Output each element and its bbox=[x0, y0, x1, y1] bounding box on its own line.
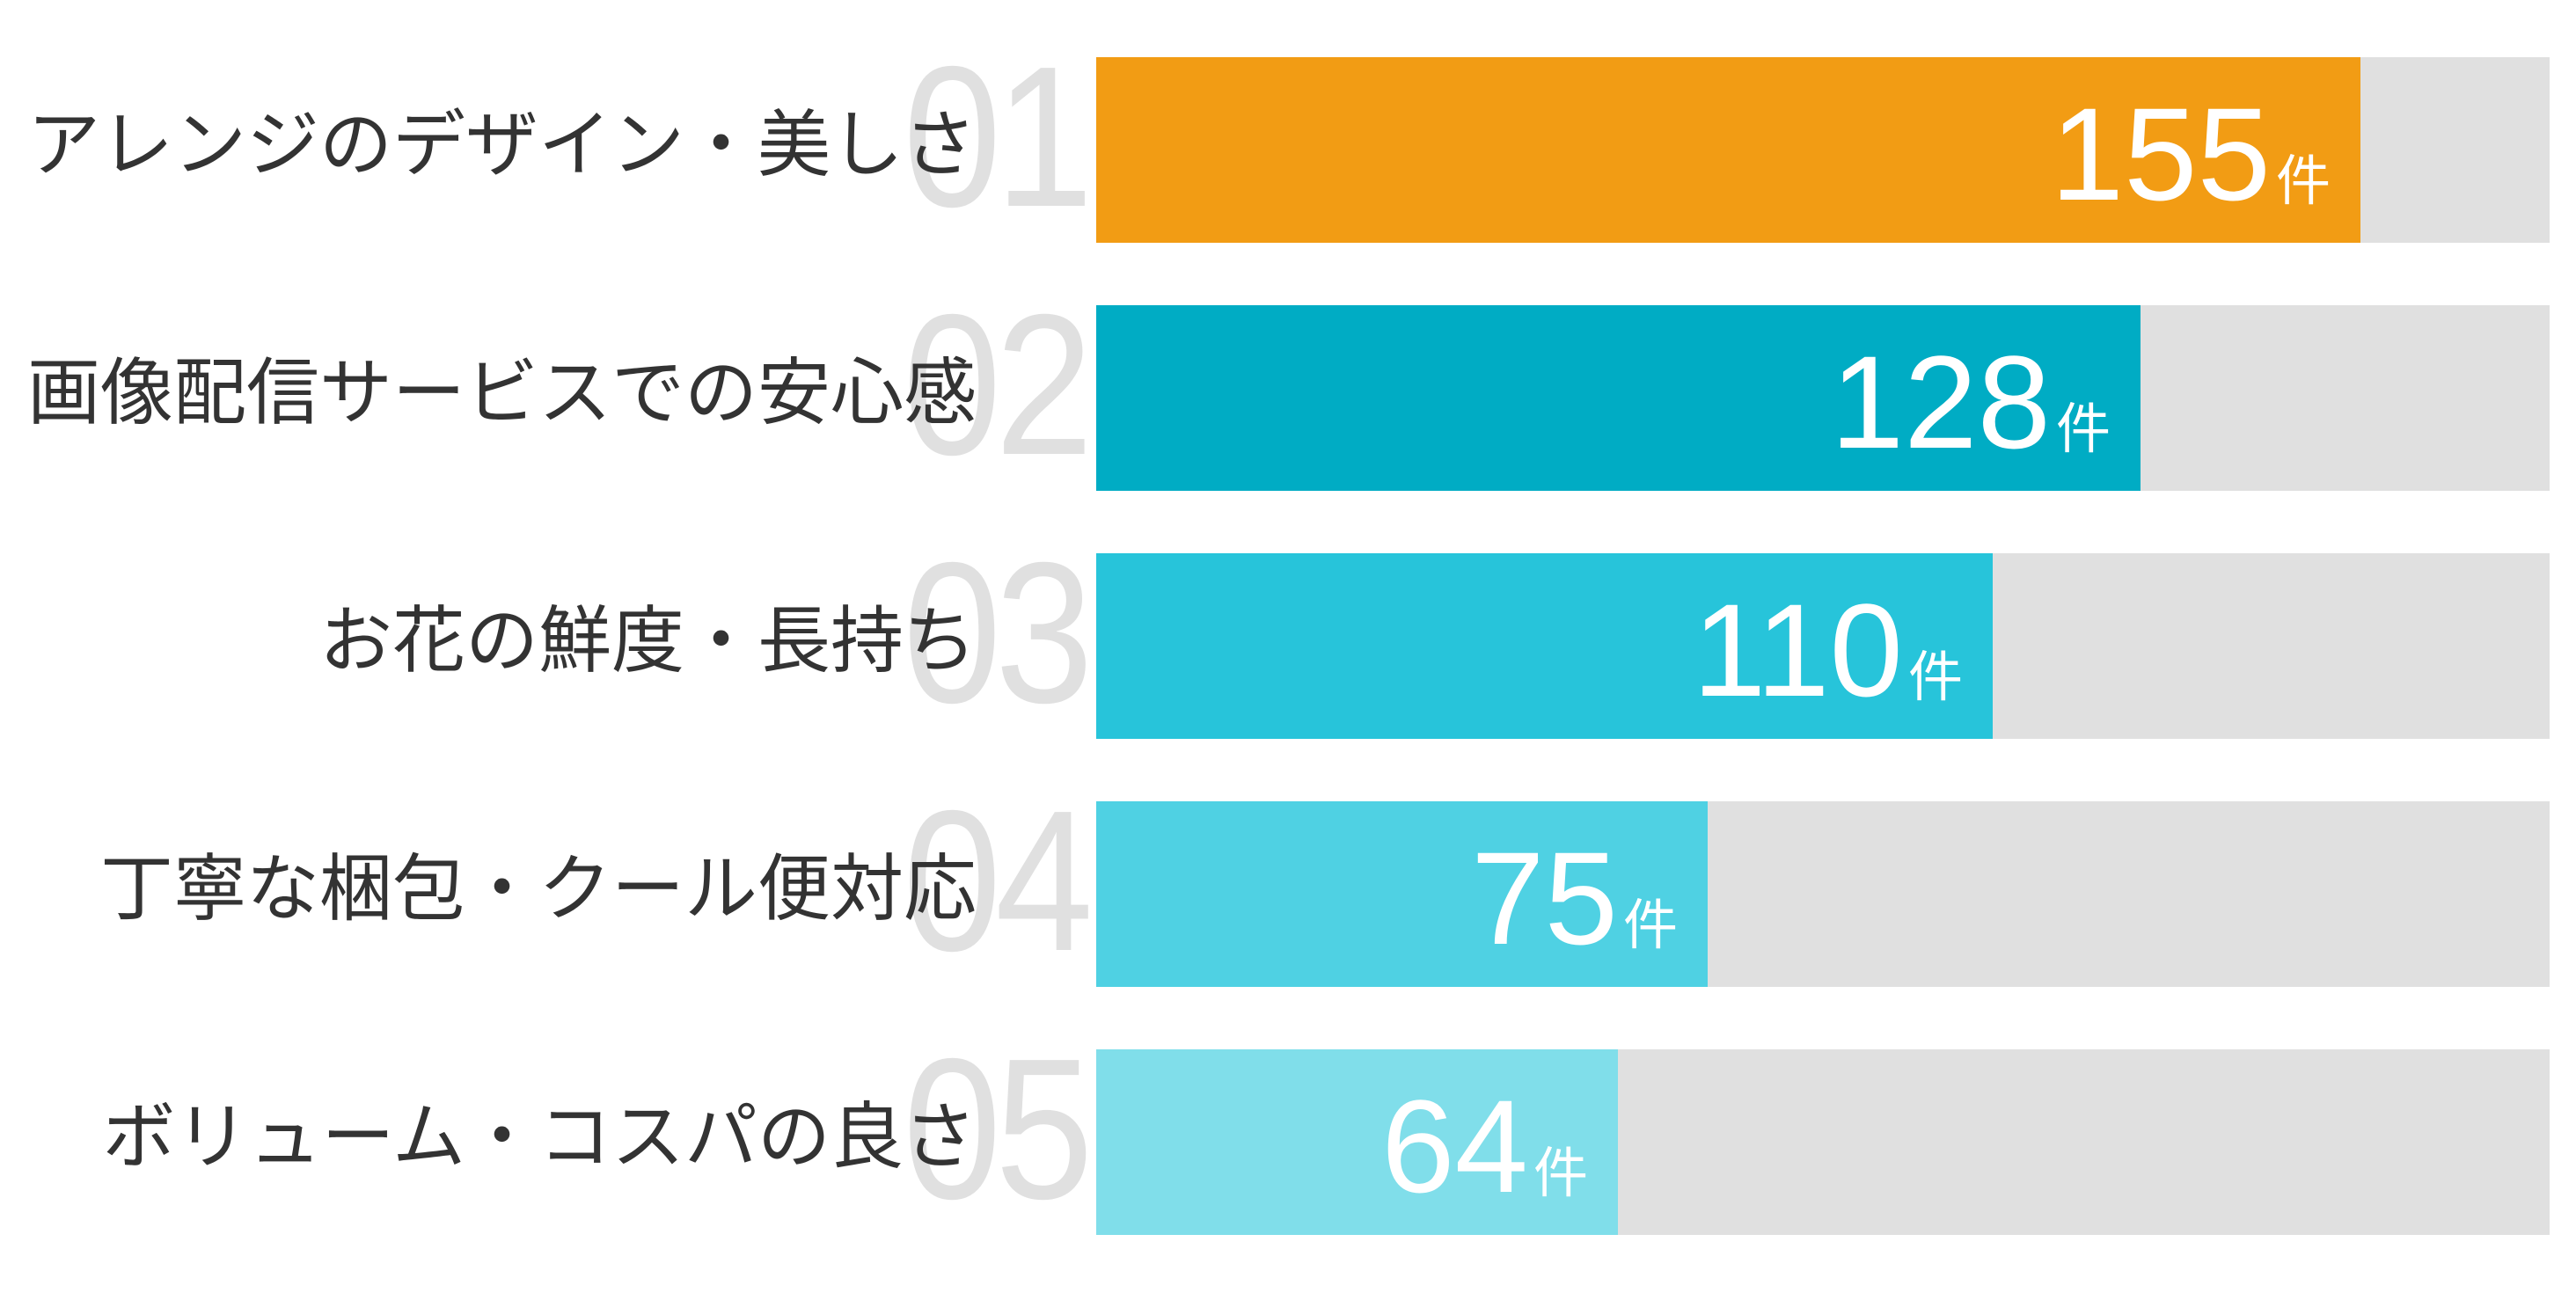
label 4: 丁寧な梱包・クール便対応 bbox=[100, 848, 977, 930]
label 1: アレンジのデザイン・美しさ bbox=[27, 104, 977, 186]
rank number 04: 04 bbox=[904, 770, 1087, 993]
row 1 bbox=[27, 26, 2550, 249]
bar 5 bbox=[1096, 1049, 2550, 1235]
row 5 bbox=[102, 1018, 2550, 1241]
label 3: お花の鮮度・長持ち bbox=[319, 600, 977, 682]
rank number 02: 02 bbox=[904, 274, 1087, 497]
rank number 05: 05 bbox=[904, 1018, 1087, 1241]
bar 2: 128件 bbox=[1831, 328, 2111, 476]
rank number 01: 01 bbox=[904, 26, 1087, 249]
bar 5: 64件 bbox=[1381, 1072, 1588, 1220]
label 5: ボリューム・コスパの良さ bbox=[102, 1096, 977, 1178]
bar 3: 110件 bbox=[1693, 576, 1963, 724]
bar 2 bbox=[1096, 305, 2550, 491]
bar 4: 75件 bbox=[1471, 824, 1678, 972]
label 2: 画像配信サービスでの安心感 bbox=[27, 352, 977, 434]
bar 3 bbox=[1096, 553, 2550, 739]
row 2 bbox=[27, 274, 2550, 497]
rank number 03: 03 bbox=[904, 522, 1087, 745]
bar 4 bbox=[1096, 801, 2550, 987]
row 4 bbox=[100, 770, 2550, 993]
bar 1: 155件 bbox=[2051, 80, 2331, 228]
row 3 bbox=[319, 522, 2550, 745]
bar 1 bbox=[1096, 57, 2550, 243]
